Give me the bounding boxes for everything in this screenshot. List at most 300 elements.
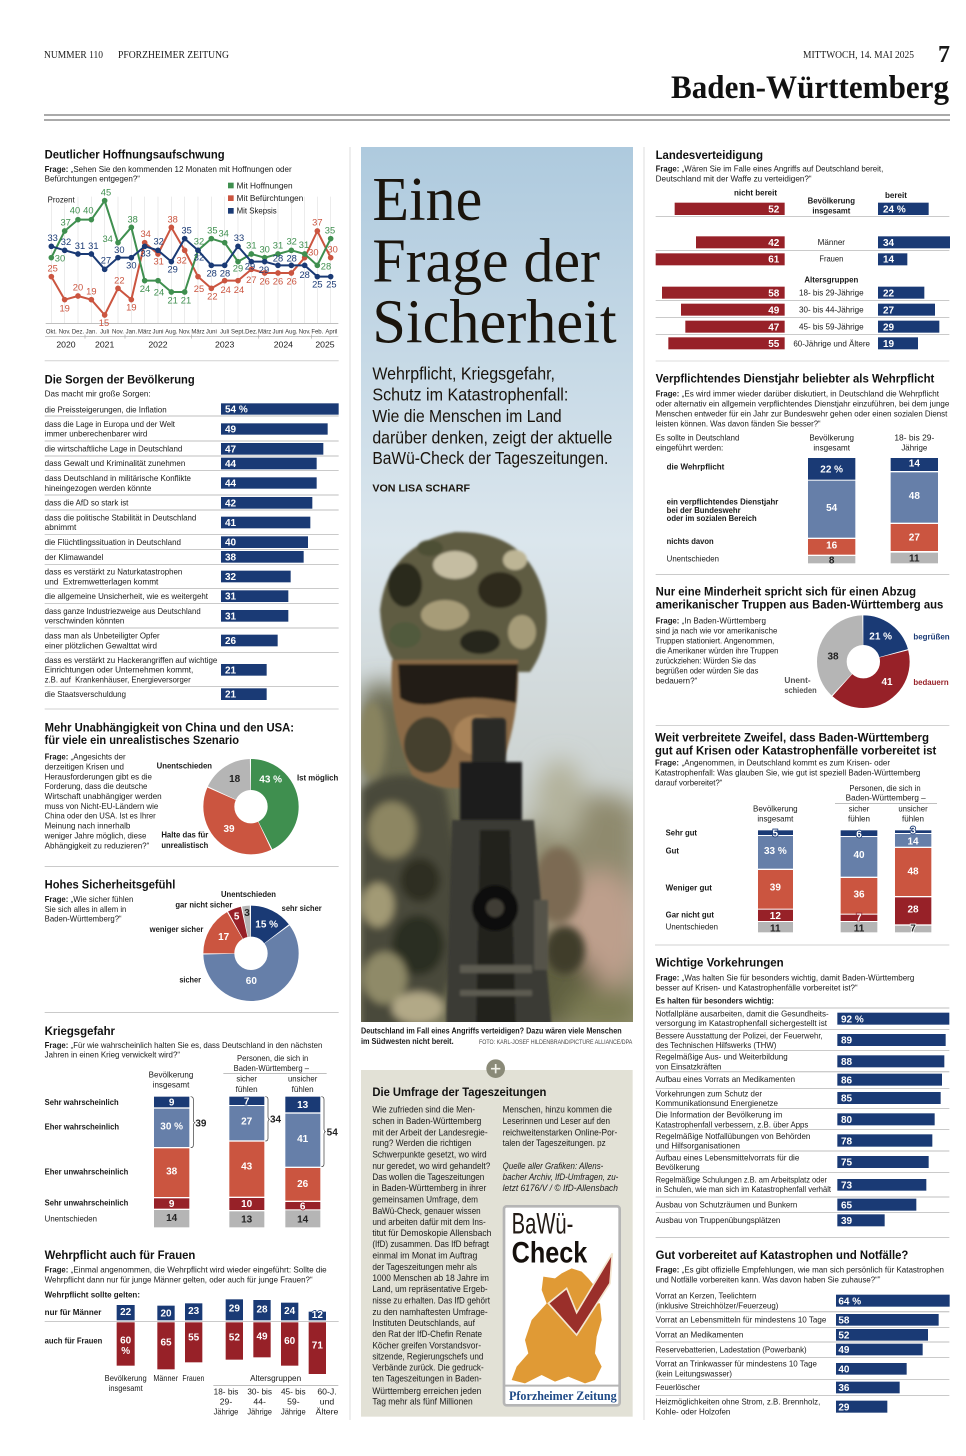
stacked bars: Bevölkerung insgesamt: 12 bbox=[770, 911, 781, 922]
donut labels: sehr sicher bbox=[282, 903, 322, 913]
question: besser auf Krisen- und Katastrophenfälle vorbereitet ist?“ bbox=[656, 982, 858, 992]
question: „Einmal angenommen, die Wehrpflicht wird wieder eingeführt: Sollte die bbox=[71, 1265, 327, 1275]
row labels: Gar nicht gut bbox=[666, 909, 714, 919]
butterfly bars: nicht bereit: 49 bbox=[768, 305, 780, 316]
bar chart: 49 bbox=[225, 425, 237, 436]
group labels: Männer bbox=[818, 237, 845, 247]
butterfly bars: nicht bereit: 58 bbox=[768, 288, 780, 299]
x axis months: Aug. bbox=[285, 329, 298, 335]
data labels: Mit Hoffnungen: 30 bbox=[55, 253, 65, 263]
data labels: Mit Hoffnungen: 37 bbox=[60, 217, 71, 227]
row labels: bei der Bundeswehr bbox=[667, 505, 741, 515]
body text column 1: Württemberg erreichen jeden bbox=[372, 1386, 481, 1396]
row labels: versorgung im Katastrophenfall sichergestellt ist bbox=[656, 1018, 828, 1028]
brackets with totals: 39 bbox=[195, 1119, 207, 1130]
bar chart: 78 bbox=[841, 1136, 853, 1147]
data labels: Mit Befürchtungen: 30 bbox=[308, 247, 319, 257]
x axis months: Nov. bbox=[179, 329, 191, 335]
title: Frage der bbox=[372, 228, 600, 296]
row labels: Weniger gut bbox=[666, 882, 712, 892]
logo: BaWü-Check: Pforzheimer Zeitung bbox=[509, 1389, 617, 1403]
question: Frage: bbox=[655, 758, 679, 768]
stacked bars: sicher fühlen: 43 bbox=[241, 1161, 253, 1172]
donut labels: 17 bbox=[218, 932, 230, 943]
panel: Gut vorbereitet auf Katastrophen und Notfälle bbox=[656, 1248, 950, 1417]
body text column 1: nur geredet, wo wird gehandelt? bbox=[372, 1161, 490, 1171]
row labels: von Einsatzkräften bbox=[656, 1061, 721, 1071]
row labels bbox=[45, 1097, 128, 1223]
data labels: Mit Skepsis: 29 bbox=[259, 265, 269, 275]
column headers: insgesamt bbox=[153, 1079, 190, 1089]
question bbox=[45, 164, 292, 184]
question: Baden-Württemberg?“ bbox=[45, 914, 122, 924]
row labels: z.B. auf Krankenhäuser, Energieversorger bbox=[45, 674, 191, 684]
butterfly bars: nicht bereit: 55 bbox=[768, 339, 780, 350]
column headers bbox=[656, 433, 934, 453]
data labels: Mit Befürchtungen: 19 bbox=[59, 303, 70, 313]
stacked bars: sicher fühlen: 7 bbox=[856, 913, 862, 924]
stacked bars: sicher fühlen bbox=[229, 1097, 264, 1227]
line chart series bbox=[51, 201, 331, 315]
x axis months: Jan. bbox=[86, 329, 97, 335]
subtitle: Wehrpflicht, Kriegsgefahr, bbox=[372, 363, 555, 383]
butterfly bars: bereit bbox=[878, 203, 950, 350]
donut labels: schieden bbox=[784, 685, 817, 695]
data labels: Mit Hoffnungen: 21 bbox=[167, 296, 178, 306]
x axis years: 2024 bbox=[274, 339, 293, 349]
column headers: unsicher bbox=[898, 804, 928, 814]
stacked bars: Bevölkerung insgesamt: 5 bbox=[773, 828, 779, 839]
body text column 2 bbox=[503, 1105, 618, 1193]
bar chart: 42 bbox=[225, 498, 237, 509]
body text column 1: rung? Werden die richtigen bbox=[372, 1138, 471, 1148]
x axis months: Dez. bbox=[245, 329, 258, 335]
stacked bars: Bevölkerung insgesamt: 9 bbox=[169, 1097, 175, 1108]
question: Es halten für besonders wichtig: bbox=[656, 995, 774, 1005]
data labels: Mit Befürchtungen: 26 bbox=[286, 277, 297, 287]
page header: Baden-Württemberg bbox=[671, 70, 949, 106]
group labels: 18- bis 29-Jährige bbox=[799, 288, 864, 298]
group labels: insgesamt bbox=[812, 206, 851, 216]
question: darauf vorbereitet?“ bbox=[655, 778, 722, 788]
stacked bars: 18- bis 29-Jährige bbox=[891, 458, 938, 565]
donut labels bbox=[784, 631, 950, 695]
group labels: 59- bbox=[287, 1396, 300, 1406]
bar chart: 32 bbox=[225, 572, 237, 583]
row labels: nichts davon bbox=[667, 536, 714, 546]
legend: Mit Hoffnungen bbox=[237, 180, 293, 190]
row labels: Bevölkerung bbox=[656, 1162, 700, 1172]
data labels: Mit Hoffnungen: 34 bbox=[218, 229, 229, 239]
body text column 1: einmal im Monat im Auftrag bbox=[372, 1251, 477, 1261]
group labels: 30- bis 44-Jährige bbox=[799, 305, 864, 315]
donut labels: Unentschieden bbox=[157, 760, 212, 770]
heading bbox=[655, 731, 936, 757]
row labels: Einrichtungen oder Unternehmen kommt, bbox=[45, 665, 193, 675]
diverging bars: % bbox=[121, 1346, 130, 1357]
row labels: Vorkehrungen zum Schutz der bbox=[656, 1088, 762, 1098]
bar chart: 64 % bbox=[838, 1296, 861, 1307]
row labels: Sehr wahrscheinlich bbox=[45, 1097, 119, 1107]
row labels: Katastrophenfall verbessern, z.B. über Apps bbox=[656, 1119, 809, 1129]
row labels: oder im sozialen Bereich bbox=[667, 513, 757, 523]
row labels: Vorrat an Kerzen, Teelichtern bbox=[656, 1290, 756, 1300]
data labels: Mit Hoffnungen: 30 bbox=[259, 245, 270, 255]
row labels: Regelmäßige Schulungen z.B. am Arbeitsplatz oder bbox=[656, 1174, 827, 1184]
bar chart: 41 bbox=[225, 518, 237, 529]
question: begrüßen oder würden Sie das bbox=[656, 665, 759, 675]
question: „Angenommen, in Deutschland kommt es zum Krisen- oder bbox=[682, 758, 890, 768]
bar chart: 47 bbox=[225, 444, 237, 455]
data labels: Mit Befürchtungen: 26 bbox=[259, 277, 270, 287]
donut labels: 15 % bbox=[255, 919, 278, 930]
row labels: Eher wahrscheinlich bbox=[45, 1122, 119, 1132]
heading: Hohes Sicherheitsgefühl bbox=[45, 877, 175, 891]
panel: Deutlicher Hoffnungsaufschwung: Prozent bbox=[48, 194, 75, 204]
column headers: Baden-Württemberg – bbox=[846, 792, 926, 802]
body text column 1: Schwerpunkte gesetzt, wo wird bbox=[372, 1150, 487, 1160]
data labels: Mit Befürchtungen bbox=[47, 214, 338, 328]
x axis months: Okt. bbox=[46, 329, 57, 335]
data labels: Mit Befürchtungen: 34 bbox=[140, 229, 151, 239]
group labels: 45- bis 59-Jährige bbox=[799, 322, 864, 332]
stacked bars: sicher fühlen: 36 bbox=[853, 890, 865, 901]
stacked bars: Bevölkerung insgesamt: 11 bbox=[770, 923, 781, 934]
column headers: insgesamt bbox=[813, 443, 851, 453]
stacked bars: Bevölkerung insgesamt: 9 bbox=[169, 1199, 175, 1210]
panel: Weit verbreitete Zweifel bbox=[655, 725, 949, 946]
stacked bars: Bevölkerung insgesamt: 33 % bbox=[764, 846, 787, 857]
legend: Mit Skepsis bbox=[237, 206, 277, 216]
row labels: des Technischen Hilfswerks (THW) bbox=[656, 1040, 776, 1050]
logo: BaWü-Check: Check bbox=[512, 1236, 588, 1269]
icon: plus bbox=[486, 1059, 505, 1078]
data labels: Mit Befürchtungen: 27 bbox=[246, 275, 257, 285]
bar chart: 75 bbox=[841, 1158, 853, 1169]
body text column 2: bacher Archiv, IfD-Umfragen, zu- bbox=[503, 1172, 618, 1182]
question: „Was halten Sie für besonders wichtig, damit Baden-Württemberg bbox=[682, 973, 914, 983]
question: Befürchtungen entgegen?“ bbox=[45, 174, 140, 184]
question: Frage: bbox=[45, 1265, 68, 1275]
body text column 1: in Baden-Württemberg in ihrer bbox=[372, 1183, 486, 1193]
data labels: Mit Befürchtungen: 26 bbox=[273, 277, 283, 287]
body text column 1: BaWü-Check, genauer wissen bbox=[372, 1206, 481, 1216]
stacked bars: Bevölkerung insgesamt: 14 bbox=[166, 1213, 178, 1224]
question: und Notfälle vorbereiten kann. Was davon haben Sie zuhause?“” bbox=[656, 1274, 880, 1284]
stacked bars: unsicher fühlen: 28 bbox=[907, 904, 919, 915]
data labels: Mit Hoffnungen: 24 bbox=[154, 288, 164, 298]
row labels: Heizmöglichkeiten ohne Strom, z.B. Brennholz, bbox=[656, 1397, 820, 1407]
data labels: Mit Skepsis: 30 bbox=[114, 245, 125, 255]
bar chart bbox=[221, 403, 339, 701]
group labels: Frauen bbox=[182, 1373, 204, 1383]
caption: FOTO: KARL-JOSEF HILDENBRAND/PICTURE ALLIANCE/DPA bbox=[479, 1040, 632, 1046]
data labels: Mit Skepsis: 25 bbox=[326, 280, 337, 290]
data labels: Mit Hoffnungen: 32 bbox=[194, 237, 204, 247]
column headers: Es sollte in Deutschland bbox=[656, 433, 739, 443]
row labels: Aufbau eines Lebensmittelvorrats für die bbox=[656, 1152, 799, 1162]
heading: Verpflichtendes Dienstjahr beliebter als Wehrpflicht bbox=[656, 372, 934, 386]
heading: Wichtige Vorkehrungen bbox=[656, 956, 784, 970]
row labels: Ausbau von Truppenübungsplätzen bbox=[656, 1215, 780, 1225]
question bbox=[45, 1040, 322, 1060]
stacked bars: Bevölkerung insgesamt: 30 % bbox=[160, 1122, 183, 1133]
data labels: Mit Hoffnungen: 40 bbox=[83, 206, 94, 216]
question: „Wären Sie im Falle eines Angriffs auf Deutschland bereit, bbox=[682, 164, 883, 174]
butterfly bars: bereit: 22 bbox=[883, 288, 895, 299]
data labels: Mit Skepsis: 25 bbox=[312, 280, 323, 290]
group labels: bereit bbox=[885, 190, 907, 200]
row labels: dass die Lage in Europa und der Welt bbox=[45, 419, 176, 429]
body text column 1 bbox=[372, 1105, 491, 1407]
column headers: fühlen bbox=[902, 814, 924, 824]
row labels: dass Gewalt und Kriminalität zunehmen bbox=[45, 458, 185, 468]
heading: Gut vorbereitet auf Katastrophen und Notfälle? bbox=[656, 1248, 908, 1262]
data labels: Mit Hoffnungen: 45 bbox=[101, 187, 111, 197]
bar chart bbox=[836, 1295, 950, 1413]
x axis months: Feb. bbox=[311, 329, 324, 335]
group labels: 60-Jährige und Ältere bbox=[793, 339, 870, 349]
donut chart bbox=[832, 630, 895, 693]
body text column 1: den Rat der IfD-Chefin Renate bbox=[372, 1329, 482, 1339]
question: Truppen stationiert. Angenommen, bbox=[656, 635, 774, 645]
row labels: Vorrat an Trinkwasser für mindestens 10 Tage bbox=[656, 1359, 817, 1369]
stacked bars: sicher fühlen: 13 bbox=[241, 1215, 253, 1226]
subtitle: Schutz im Katastrophenfall: bbox=[372, 385, 568, 405]
bar chart: 31 bbox=[225, 611, 237, 622]
row labels: Feuerlöscher bbox=[656, 1382, 700, 1392]
row labels bbox=[667, 461, 779, 563]
x axis months: Dez. bbox=[72, 329, 84, 335]
question: Frage: bbox=[656, 615, 679, 625]
row labels: die Flüchtlingssituation in Deutschland bbox=[45, 537, 181, 547]
row labels: Vorrat an Medikamenten bbox=[656, 1329, 744, 1339]
butterfly bars: bereit: 14 bbox=[883, 255, 895, 266]
bar chart: 31 bbox=[225, 592, 237, 603]
row labels bbox=[656, 1290, 826, 1417]
data labels: Mit Skepsis: 29 bbox=[245, 262, 255, 272]
question: derzeitigen Krisen und bbox=[45, 761, 124, 771]
diverging bars bbox=[117, 1299, 326, 1374]
x axis months: Aug. bbox=[165, 329, 178, 335]
row labels: dass man als Unbeteiligter Opfer bbox=[45, 630, 160, 640]
heading: Mehr Unabhängigkeit von China und den USA: bbox=[45, 721, 294, 735]
title bbox=[372, 166, 617, 357]
group labels: Ältere bbox=[316, 1406, 338, 1416]
diverging bars: 60 bbox=[120, 1335, 132, 1346]
data labels: Mit Befürchtungen: 38 bbox=[167, 214, 178, 224]
stacked bars: Bevölkerung insgesamt bbox=[154, 1097, 189, 1227]
panel: Wehrpflicht auch für Frauen bbox=[45, 1248, 339, 1416]
data labels: Mit Hoffnungen: 31 bbox=[273, 241, 283, 251]
row labels: nur für Männer bbox=[45, 1307, 102, 1317]
row labels: die Preissteigerungen, die Inflation bbox=[45, 404, 167, 414]
group labels: 30- bis bbox=[247, 1386, 273, 1396]
stacked bars: sicher fühlen: 11 bbox=[854, 923, 865, 934]
row labels: (kein Leitungswasser) bbox=[656, 1368, 732, 1378]
row labels: Unentschieden bbox=[45, 1213, 97, 1223]
data labels: Mit Skepsis: 33 bbox=[234, 233, 244, 243]
question: bedauern?“ bbox=[656, 675, 697, 685]
bar chart: 80 bbox=[841, 1115, 853, 1126]
data labels: Mit Befürchtungen: 20 bbox=[73, 283, 83, 293]
panel: main title bbox=[372, 166, 617, 495]
title: Sicherheit bbox=[372, 289, 617, 357]
data labels: Mit Befürchtungen: 19 bbox=[86, 287, 97, 297]
bar chart: 44 bbox=[225, 459, 237, 470]
question: Frage: bbox=[45, 894, 68, 904]
x axis months: Jan. bbox=[126, 329, 137, 335]
stacked bars: sicher fühlen: 10 bbox=[241, 1199, 253, 1210]
question: zurückziehen: Würden Sie das bbox=[656, 655, 757, 665]
heading: Die Sorgen der Bevölkerung bbox=[45, 372, 195, 386]
data labels: Mit Skepsis: 29 bbox=[167, 265, 178, 275]
question: Wirtschaft unabhängiger werden bbox=[45, 791, 162, 801]
body text column 2: Leserinnen und Leser auf den bbox=[503, 1116, 610, 1126]
row labels: Sehr unwahrscheinlich bbox=[45, 1198, 128, 1208]
row labels: Die Information der Bevölkerung im bbox=[656, 1110, 782, 1120]
data labels: Mit Befürchtungen: 30 bbox=[327, 245, 338, 255]
donut labels: 38 bbox=[827, 652, 839, 663]
question: oder alternativ ein allgemein verpflichtendes Dienstjahr einzuführen, bei dem junge bbox=[656, 399, 949, 409]
row labels: dass die politische Stabilität in Deutschland bbox=[45, 513, 196, 523]
data labels: Mit Skepsis: 32 bbox=[153, 237, 164, 247]
data labels: Mit Befürchtungen: 31 bbox=[153, 257, 164, 267]
data labels: Mit Skepsis: 28 bbox=[286, 253, 297, 263]
row labels: Ausbau von Schutzräumen und Bunkern bbox=[656, 1199, 797, 1209]
donut labels: 5 bbox=[234, 912, 240, 923]
donut labels: 41 bbox=[881, 677, 893, 688]
x axis months: Juli bbox=[100, 329, 109, 335]
caption bbox=[361, 1025, 632, 1046]
row labels: und Extremwetterlagen kommt bbox=[45, 576, 159, 586]
byline: VON LISA SCHARF bbox=[372, 484, 470, 495]
x axis months: April bbox=[325, 329, 337, 335]
row labels: Unentschieden bbox=[666, 922, 718, 932]
bar chart: 40 bbox=[225, 538, 237, 549]
bar chart: 58 bbox=[838, 1315, 850, 1326]
row labels: Kommunikationsund Energienetze bbox=[656, 1098, 778, 1108]
row labels: Aufbau eines Vorrats an Medikamenten bbox=[656, 1074, 795, 1084]
column headers: sicher bbox=[849, 804, 869, 814]
column headers: 18- bis 29- bbox=[894, 433, 934, 443]
question: Frage: bbox=[45, 164, 68, 174]
body text column 1: der Tageszeitungen mehr als bbox=[372, 1262, 477, 1272]
diverging bars: 22 bbox=[120, 1307, 132, 1318]
body text column 1: gemeinsamen Umfrage, dem bbox=[372, 1195, 478, 1205]
question bbox=[655, 758, 921, 788]
group labels: 18- bis bbox=[214, 1386, 239, 1396]
question bbox=[45, 894, 133, 924]
x axis months: März bbox=[191, 329, 205, 335]
question: Jahren in einen Krieg verwickelt wird?“ bbox=[45, 1050, 180, 1060]
row labels: Notfallpläne ausarbeiten, damit die Gesundheits- bbox=[656, 1009, 829, 1019]
heading bbox=[45, 721, 294, 747]
row labels: Vorrat an Lebensmitteln für mindestens 10 Tage bbox=[656, 1315, 826, 1325]
bar chart: 52 bbox=[838, 1330, 850, 1341]
question: „Es gibt offizielle Empfehlungen, wie man sich persönlich für Katastrophen bbox=[682, 1265, 944, 1275]
bar chart: 89 bbox=[841, 1036, 853, 1047]
data labels: Mit Befürchtungen: 37 bbox=[312, 217, 323, 227]
x axis months: Juni bbox=[206, 329, 217, 335]
x axis months: März bbox=[258, 329, 271, 335]
row labels: dass es verstärkt zu Hackerangriffen auf wichtige bbox=[45, 655, 217, 665]
donut labels bbox=[149, 889, 322, 987]
butterfly bars: nicht bereit: 42 bbox=[768, 238, 780, 249]
diverging bars: 55 bbox=[188, 1333, 200, 1344]
question: leisten können. Was davon fänden Sie besser?“ bbox=[656, 418, 821, 428]
heading: amerikanischer Truppen aus Baden-Württemberg aus bbox=[656, 598, 943, 612]
column headers: unsicher bbox=[288, 1074, 317, 1084]
donut labels: bedauern bbox=[913, 677, 949, 687]
stacked bars: sicher fühlen: 6 bbox=[856, 830, 862, 841]
brackets with totals bbox=[191, 1097, 338, 1167]
page header: PFORZHEIMER ZEITUNG bbox=[118, 50, 229, 61]
stacked bars: Bevölkerung insgesamt: 39 bbox=[770, 882, 781, 893]
donut labels: 21 % bbox=[869, 631, 892, 642]
bar chart: 86 bbox=[841, 1075, 853, 1086]
heading: Deutlicher Hoffnungsaufschwung bbox=[45, 147, 225, 161]
group labels bbox=[105, 1373, 338, 1416]
group labels: Jährige bbox=[281, 1406, 306, 1416]
stacked bars: 18- bis 29-Jährige: 11 bbox=[909, 554, 920, 565]
donut labels bbox=[157, 760, 338, 850]
subtitle: BaWü-Check der Tageszeitungen. bbox=[372, 448, 608, 468]
diverging bars: 23 bbox=[188, 1306, 200, 1317]
column headers: Baden-Württemberg – bbox=[234, 1063, 309, 1073]
row labels: Regelmäßige Aus- und Weiterbildung bbox=[656, 1052, 788, 1062]
column headers bbox=[149, 1053, 327, 1094]
question bbox=[45, 1265, 327, 1284]
column headers: Bevölkerung bbox=[753, 804, 798, 814]
group labels: 29- bbox=[220, 1396, 232, 1406]
question: China oder den USA. Ist es Ihrer bbox=[45, 811, 156, 821]
row labels: die wirtschaftliche Lage in Deutschland bbox=[45, 444, 182, 454]
data labels: Mit Befürchtungen: 32 bbox=[176, 256, 187, 266]
question: „Wie sicher fühlen bbox=[71, 894, 133, 904]
body text column 2: letzt 6176/V / © IfD-Allensbach bbox=[503, 1183, 618, 1193]
question bbox=[656, 973, 914, 1005]
panel: Mehr Unabhängigkeit von China und den USA bbox=[44, 721, 339, 1012]
donut chart bbox=[219, 774, 283, 839]
panel: Titelfoto bbox=[358, 147, 645, 1032]
bar chart: 65 bbox=[841, 1200, 853, 1211]
logo: BaWü-Check: BaWü- bbox=[512, 1207, 573, 1240]
row labels bbox=[45, 1290, 140, 1345]
group labels: Altersgruppen bbox=[250, 1373, 301, 1383]
x axis years: 2025 bbox=[315, 339, 335, 349]
row labels: ein verpflichtendes Dienstjahr bbox=[667, 496, 779, 506]
bar chart: 21 bbox=[225, 665, 237, 676]
data labels: Mit Hoffnungen: 32 bbox=[286, 237, 297, 247]
heading: für viele ein unrealistisches Szenario bbox=[45, 733, 239, 747]
question bbox=[656, 389, 949, 428]
diverging bars: 24 bbox=[284, 1306, 296, 1317]
photo: soldier with rifle bbox=[358, 532, 645, 1032]
x axis months: Nov. bbox=[59, 329, 71, 335]
stacked bars: Bevölkerung insgesamt: 22 % bbox=[820, 465, 843, 476]
panel: Wichtige Vorkehrungen bbox=[656, 956, 949, 1237]
diverging bars: 49 bbox=[256, 1331, 268, 1342]
stacked bars: unsicher fühlen: 3 bbox=[910, 826, 916, 837]
row labels: Regelmäßige Notfallübungen von Behörden bbox=[656, 1131, 810, 1141]
donut labels: weniger sicher bbox=[149, 924, 204, 934]
bar chart: 38 bbox=[225, 552, 237, 563]
data labels: Mit Hoffnungen: 34 bbox=[102, 234, 113, 244]
stacked bars: unsicher fühlen: 26 bbox=[297, 1179, 309, 1190]
body text column 1: Verbände zurück. Die gedruck- bbox=[372, 1363, 484, 1373]
bar chart: 26 bbox=[225, 636, 237, 647]
